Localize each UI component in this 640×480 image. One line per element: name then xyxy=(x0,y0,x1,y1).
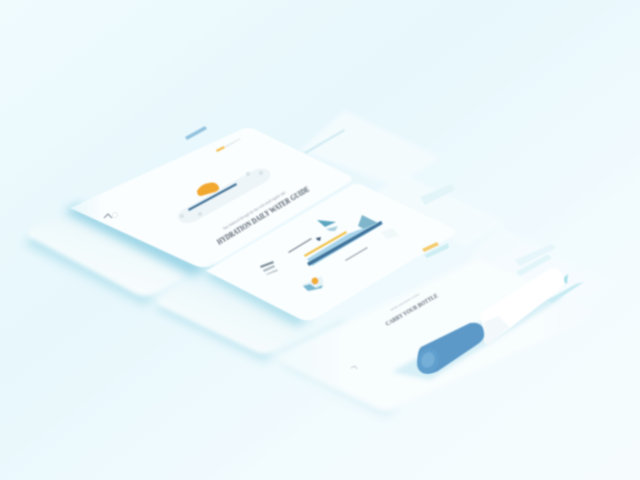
top tab bar xyxy=(185,126,207,140)
bottle: blue cap xyxy=(413,323,484,377)
chart yellow line xyxy=(304,231,347,257)
chart base block xyxy=(307,221,383,266)
chart blue line xyxy=(307,221,382,266)
heading text: pen card: CARRY YOUR BOTTLE xyxy=(385,292,439,328)
panel: lower left ghost card xyxy=(24,205,188,306)
back card accent line xyxy=(304,129,345,154)
line left xyxy=(288,238,312,253)
triangle right xyxy=(358,215,378,229)
card accent tab xyxy=(216,138,241,152)
capsule illustration xyxy=(178,168,270,223)
side note block xyxy=(260,261,278,275)
sun blob xyxy=(197,182,219,196)
note right xyxy=(381,228,399,239)
right tag: yellow xyxy=(422,242,439,252)
panel: back right upper xyxy=(300,110,440,186)
heading text: overview card: HYDRATION DAILY WATER GUIDE xyxy=(215,184,311,247)
line right xyxy=(345,247,368,261)
shadow of pen xyxy=(392,296,565,380)
bottle: white collar xyxy=(484,316,510,344)
icon: chevron xyxy=(104,214,112,218)
sub text: overview card: Stay balanced through the day with small regular sips xyxy=(222,189,287,231)
chart: bars xyxy=(288,215,399,266)
mini sun chart xyxy=(302,276,324,292)
cap end xyxy=(413,345,443,377)
panel: overview card xyxy=(64,128,352,276)
pen teal accents xyxy=(516,254,584,303)
bottle: white body xyxy=(480,268,564,344)
panel: chart card xyxy=(205,184,456,326)
capsule body xyxy=(178,168,270,223)
triangle left xyxy=(317,220,336,227)
right tag: aqua xyxy=(424,243,449,258)
icon: small chevron xyxy=(351,366,357,369)
triangle left base xyxy=(326,226,338,231)
panel: lower middle ghost card xyxy=(155,272,305,362)
panel: back right middle xyxy=(370,172,505,246)
cap inner xyxy=(419,350,437,370)
marker xyxy=(316,237,321,241)
panel: back right lower xyxy=(470,228,615,310)
capsule bar xyxy=(188,183,237,211)
panel: pen card xyxy=(277,258,608,418)
icon: chevron faint xyxy=(112,212,118,218)
sub text: pen card: drink anywhere today xyxy=(390,292,420,312)
capsule dots xyxy=(180,171,263,218)
